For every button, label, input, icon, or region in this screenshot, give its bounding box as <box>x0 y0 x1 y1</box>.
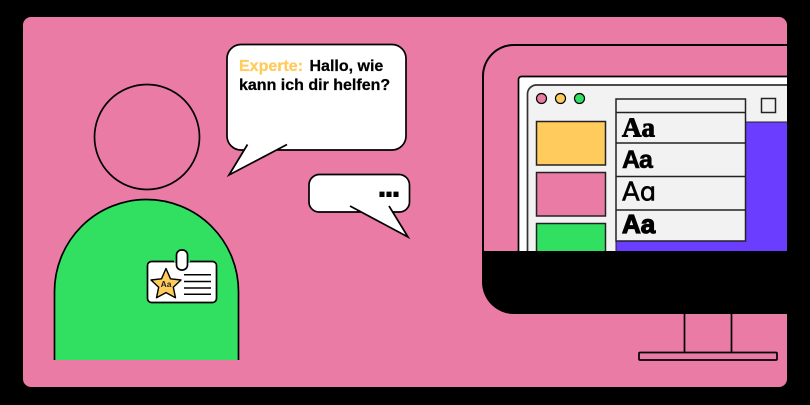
monitor body <box>482 44 800 314</box>
typing dots: ... <box>377 164 399 205</box>
monitor stand neck <box>684 314 732 352</box>
swatch: pink <box>536 172 606 216</box>
swatch: yellow <box>536 122 606 165</box>
speech bubble: typing reply <box>309 164 410 237</box>
bubble shape <box>309 174 410 237</box>
screen background <box>482 45 792 251</box>
bubble text: kann ich dir helfen? <box>239 77 390 94</box>
badge star icon <box>151 268 181 298</box>
bubble outline <box>227 44 406 175</box>
badge star label: Aa <box>161 279 172 289</box>
window dot: green <box>574 94 584 104</box>
swatch: green <box>536 222 606 251</box>
monitor chin <box>514 251 800 281</box>
bubble shape <box>227 44 406 175</box>
speech bubble: expert greeting <box>227 44 406 175</box>
font sample: sans bold: Aa <box>622 146 654 174</box>
dropdown box <box>616 99 746 241</box>
badge text lines <box>184 275 211 294</box>
monitor screen <box>484 46 787 251</box>
body <box>54 200 238 360</box>
monitor <box>482 44 810 360</box>
head <box>94 84 200 190</box>
monitor stand base <box>639 352 777 360</box>
browser window frame <box>518 76 787 251</box>
font sample: heavy: Aa <box>622 209 656 239</box>
badge clip gap <box>174 258 190 262</box>
purple content area <box>616 122 787 251</box>
bubble outline <box>309 174 410 237</box>
bubble text: Hallo, wie <box>310 58 383 75</box>
bubble text: Experte: <box>239 58 303 75</box>
body outline <box>54 200 238 360</box>
dropdown dividers <box>616 112 746 210</box>
badge card <box>148 262 216 302</box>
font dropdown <box>616 99 746 241</box>
person figure <box>54 84 238 360</box>
name badge <box>148 250 216 302</box>
font sample: geometric: Aɑ <box>622 178 656 208</box>
badge clip <box>176 250 188 270</box>
window dot: yellow <box>556 94 566 104</box>
window dot: pink <box>536 94 546 104</box>
font sample: serif: Aa <box>622 112 655 142</box>
browser window inner <box>526 84 787 251</box>
window square button <box>762 98 776 112</box>
